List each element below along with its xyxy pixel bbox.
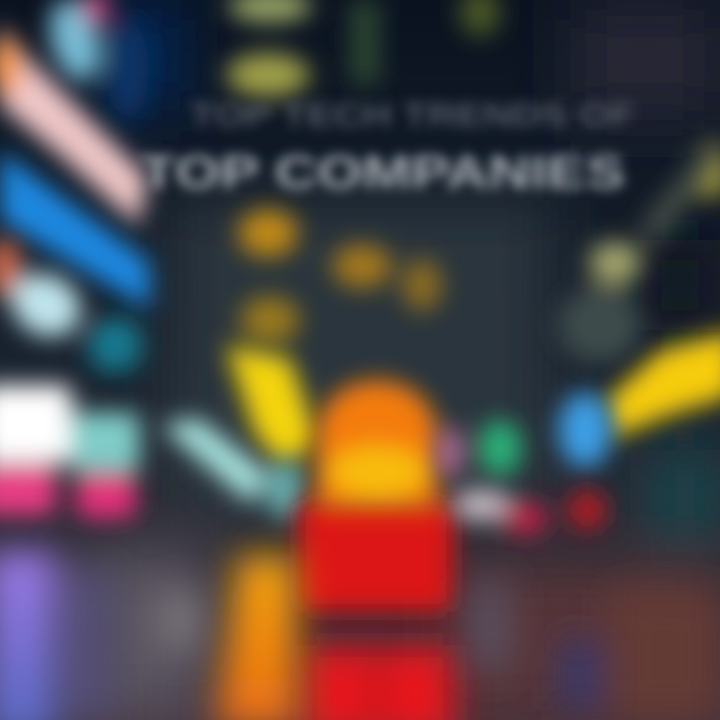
- right street lights: [438, 130, 720, 536]
- orange floor reflection: [215, 555, 300, 720]
- red lower reflection: [305, 645, 455, 720]
- left neon signs: [0, 0, 150, 518]
- central glowing figure: [160, 345, 455, 720]
- orange dome: [316, 380, 438, 510]
- sign: diagonal white-pink stripe: [0, 25, 148, 226]
- amber lanterns: [238, 209, 442, 344]
- title upper line: TOP TECH TRENDS OF: [190, 97, 635, 133]
- cyan diagonal light: [160, 418, 303, 520]
- floor right reflection: [470, 580, 720, 720]
- sign: diagonal blue stripe: [0, 150, 150, 310]
- blue blob: [558, 392, 612, 468]
- title: blurred heading: [140, 97, 635, 198]
- sign: white and pink panels: [0, 385, 140, 518]
- red body: [298, 500, 454, 612]
- top hanging lights: [226, 0, 500, 97]
- upper right lights: [558, 130, 720, 363]
- yellow stripe sign: [606, 330, 720, 438]
- sign: top-left pink and blue arc: [41, 0, 148, 120]
- sign: lower left lights: [0, 238, 143, 373]
- title lower line: TOP COMPANIES: [140, 146, 625, 198]
- purple floor reflection: [0, 550, 200, 720]
- red and white lights: [452, 489, 607, 536]
- green blob: [438, 420, 522, 478]
- yellow diagonal sign: [226, 345, 318, 468]
